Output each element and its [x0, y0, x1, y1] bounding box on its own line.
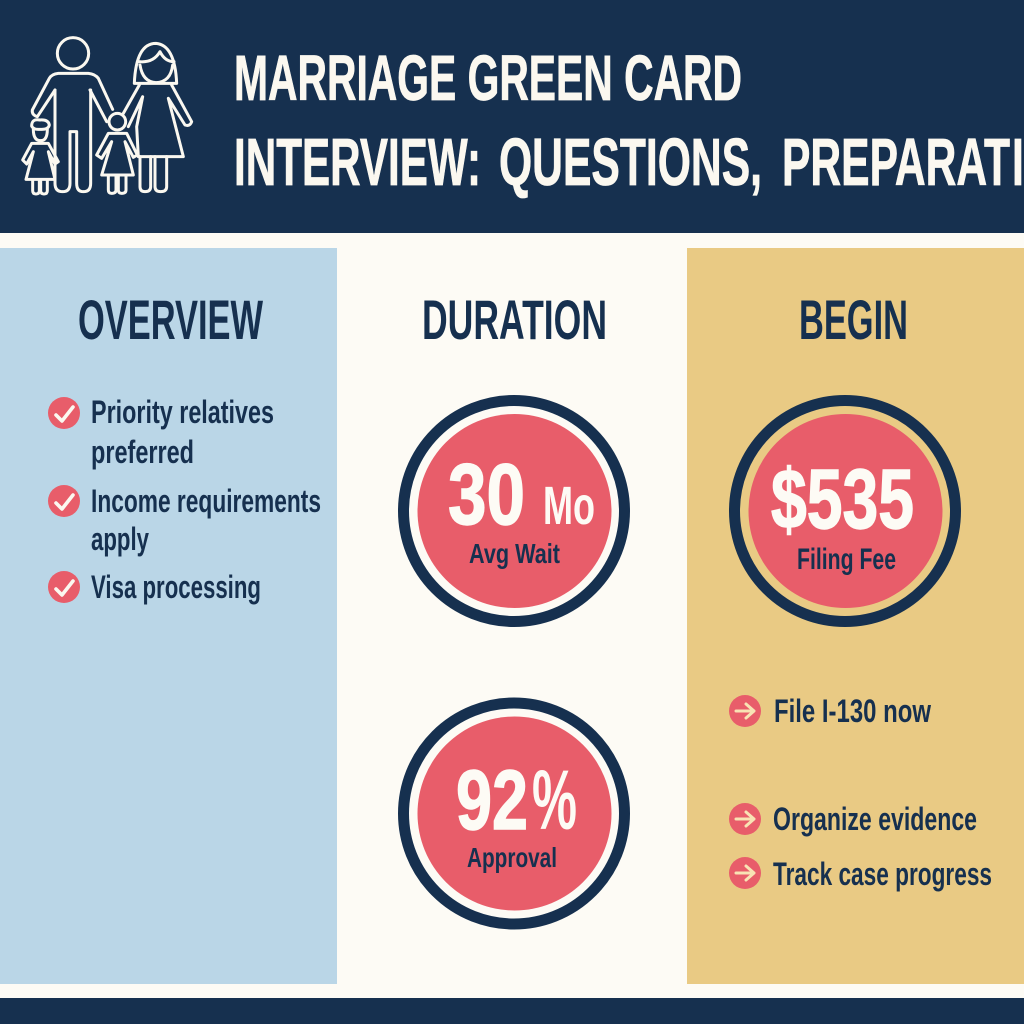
checklist item 3: Visa processing: [91, 569, 261, 605]
action item 1: [729, 693, 931, 729]
stat: filing fee: $535: [771, 452, 914, 546]
heading: duration: DURATION: [422, 288, 607, 351]
footer band: [0, 998, 1024, 1024]
checklist item 1: Priority relatives: [91, 394, 274, 430]
panel: overview: [0, 248, 337, 984]
title line 2: [234, 125, 1024, 200]
checklist item 2: Income requirements: [91, 483, 321, 519]
stat: average wait: 30: [448, 447, 525, 543]
panel: duration: [404, 288, 624, 924]
title line 2: QUESTIONS,: [499, 125, 762, 200]
panel: begin: [687, 248, 1024, 984]
stat: approval: %: [532, 753, 577, 847]
checklist item 3: [48, 569, 261, 605]
stat: approval: 92: [456, 753, 528, 847]
checklist item 1: preferred: [91, 434, 194, 470]
icon: family: [23, 38, 192, 194]
action item 1: File I-130 now: [774, 693, 931, 729]
action item 2: [729, 801, 977, 837]
stat: average wait: Avg Wait: [469, 538, 560, 569]
stat: average wait: Mo: [543, 476, 595, 536]
checklist item 1: [48, 394, 274, 470]
title line 2: INTERVIEW:: [234, 125, 481, 200]
stat: average wait: [404, 400, 624, 622]
heading: begin: BEGIN: [799, 288, 908, 351]
stat: filing fee: Filing Fee: [797, 543, 896, 576]
header band: [0, 0, 1024, 233]
stat: approval: Approval: [467, 842, 557, 873]
stat: filing fee: [734, 400, 956, 622]
checklist item 2: apply: [91, 521, 149, 557]
stat: approval: [404, 703, 624, 924]
heading: overview: OVERVIEW: [78, 288, 263, 351]
checklist item 2: [48, 483, 321, 557]
title line 1: MARRIAGE GREEN CARD: [234, 42, 742, 114]
